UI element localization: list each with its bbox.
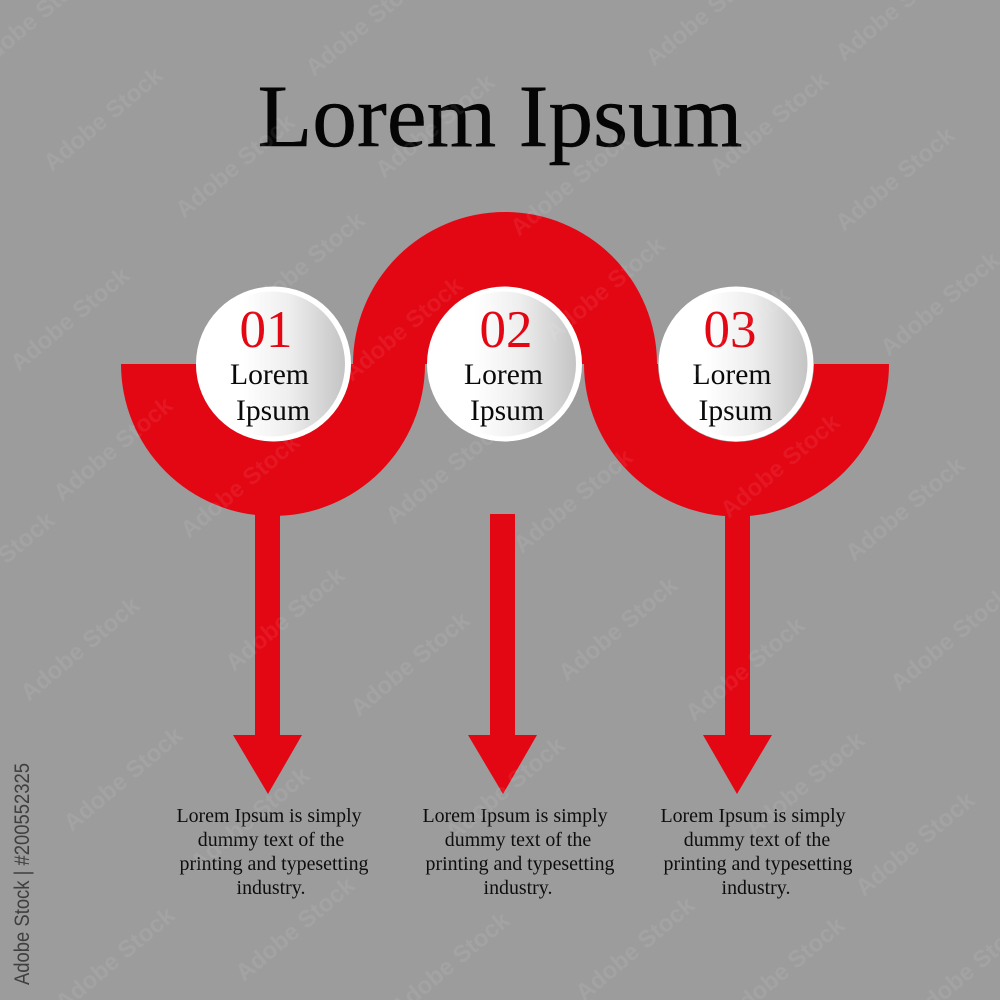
watermarks: Adobe Stock [715,408,846,524]
watermarks: Adobe Stock [440,731,571,847]
description 2: dummy text of the [445,829,591,851]
watermarks: Adobe Stock [704,66,835,182]
description 3 [660,805,853,899]
step 1 badge: Lorem [230,359,309,391]
watermarks: Adobe Stock [345,606,476,722]
step 1 badge [196,286,351,442]
watermarks: Adobe Stock [170,108,301,224]
watermarks: Adobe Stock [338,271,469,387]
step 1 badge: Ipsum [236,395,310,427]
step 3 badge: 03 [704,301,756,359]
arrow 1 [233,514,302,794]
watermarks: Adobe Stock [240,206,371,322]
watermarks: Adobe Stock [505,126,636,242]
watermarks: Adobe Stock [553,571,684,687]
description 2: industry. [484,877,552,899]
watermarks: Adobe Stock [48,391,179,507]
watermarks: Adobe Stock [740,726,871,842]
watermarks: Adobe Stock [540,231,671,347]
watermarks: Adobe Stock [370,68,501,184]
watermarks: Adobe Stock [508,443,639,559]
watermarks: Adobe Stock [680,611,811,727]
description 1 [176,805,369,899]
description 1: Lorem Ipsum is simply [176,805,362,827]
step 2 badge: Ipsum [470,395,544,427]
watermarks: Adobe Stock [58,721,189,837]
watermarks: Adobe Stock [665,281,796,397]
stock id vertical text: Adobe Stock | #200552325 [11,763,34,985]
watermarks: Adobe Stock [15,591,146,707]
step 2 badge: 02 [480,301,532,359]
watermarks: Adobe Stock [185,761,316,877]
watermarks: Adobe Stock [230,871,361,987]
watermarks: Adobe Stock [850,786,981,902]
watermarks: Adobe Stock [38,61,169,177]
arrow 2 [468,514,537,794]
description 2: printing and typesetting [426,853,615,875]
watermarks: Adobe Stock [830,121,961,237]
watermarks: Adobe Stock [380,414,511,530]
description 3: printing and typesetting [664,853,853,875]
arrow 3 [703,514,772,794]
description 3: industry. [722,877,790,899]
step 2 badge: Lorem [464,359,543,391]
description 2: Lorem Ipsum is simply [422,805,608,827]
step 3 badge: Ipsum [699,395,772,427]
description 1: printing and typesetting [180,853,369,875]
description 1: dummy text of the [198,829,344,851]
step 1 badge: 01 [240,301,292,359]
watermarks: Adobe Stock [220,561,351,677]
watermarks: Adobe Stock [5,261,136,377]
description 2 [422,805,615,899]
title: Lorem Ipsum [258,67,742,166]
description 3: dummy text of the [684,829,830,851]
step 3 badge: Lorem [693,359,771,391]
step 2 badge [427,286,582,442]
description 3: Lorem Ipsum is simply [660,805,846,827]
step 3 badge [658,286,814,442]
red wave ribbon [121,212,889,516]
description 1: industry. [237,877,305,899]
watermarks: Adobe Stock [175,428,306,544]
watermarks: Adobe Stock [840,451,971,567]
